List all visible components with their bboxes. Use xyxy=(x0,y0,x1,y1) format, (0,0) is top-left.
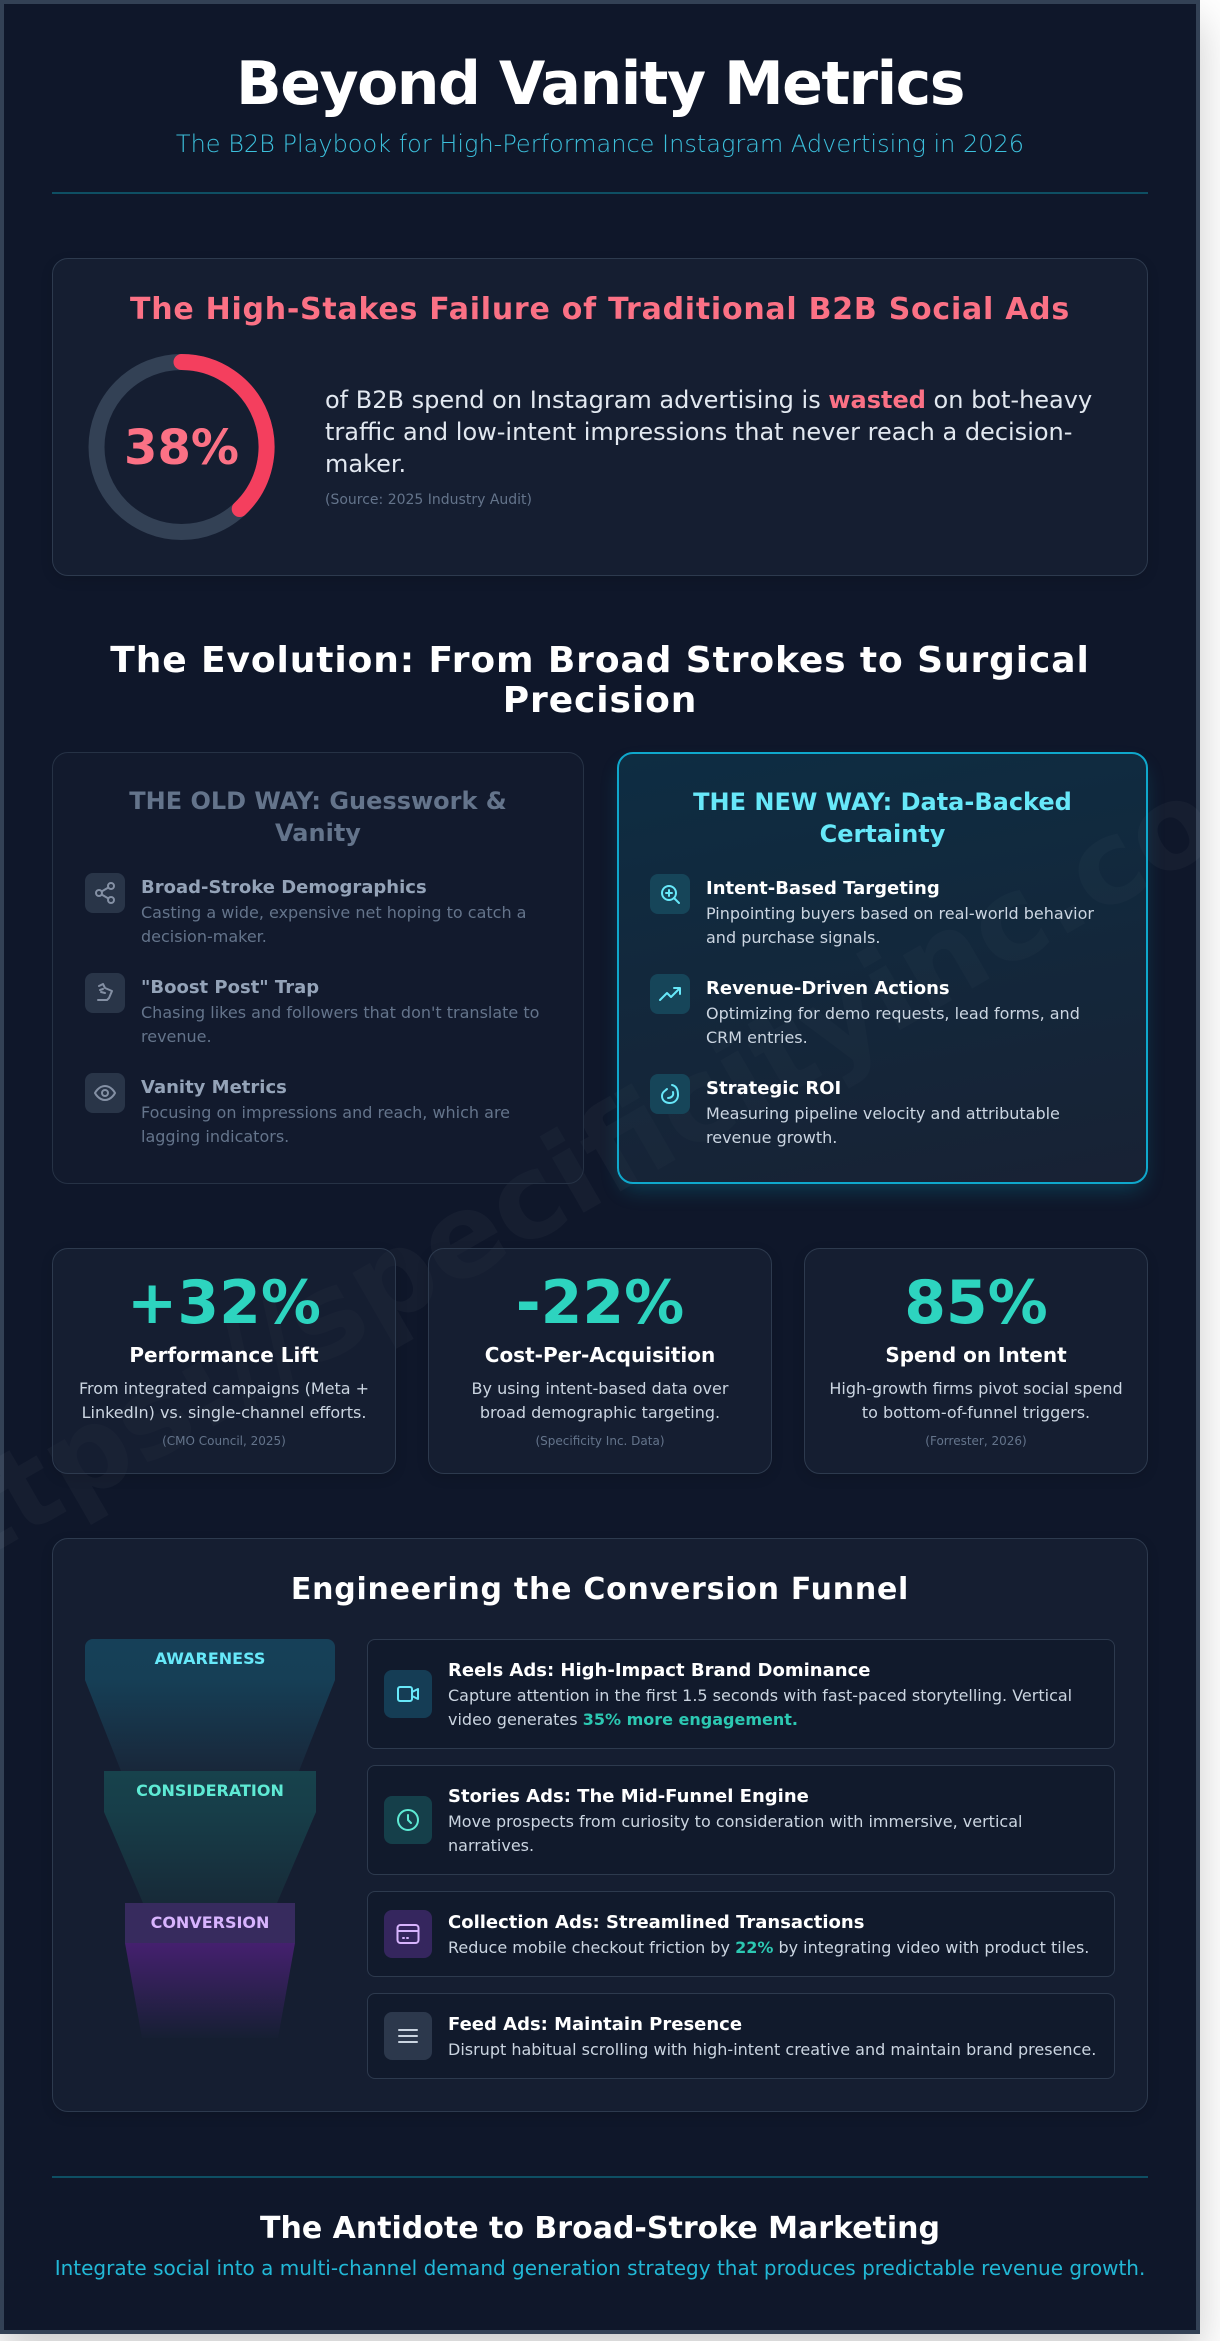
ad card: stories xyxy=(367,1765,1115,1875)
heading: old way: THE OLD WAY: Guesswork & Vanity xyxy=(129,787,507,847)
icon: eye xyxy=(85,1073,125,1113)
funnel stage: awareness xyxy=(85,1639,335,1771)
item title: roi: Strategic ROI xyxy=(706,1078,841,1099)
icon: trending up xyxy=(650,974,690,1014)
stat card: spend on intent: 85% xyxy=(904,1268,1048,1338)
stat card: performance lift: +32% xyxy=(127,1268,321,1338)
icon: clock xyxy=(384,1796,432,1844)
title: feed: Feed Ads: Maintain Presence xyxy=(448,2014,742,2035)
heading: failure: The High-Stakes Failure of Traditional B2B Social Ads xyxy=(130,292,1070,327)
icon: card xyxy=(384,1910,432,1958)
stat card: cost per acquisition: By using intent-based data over broad demographic targeting. xyxy=(472,1379,728,1422)
icon: video xyxy=(384,1670,432,1718)
stat card: performance lift: From integrated campaigns (Meta + LinkedIn) vs. single-channel efforts. xyxy=(79,1379,369,1422)
stat card: performance lift: (CMO Council, 2025) xyxy=(162,1434,286,1448)
panel: conversion funnel xyxy=(52,1538,1148,2112)
icon: share xyxy=(85,873,125,913)
stat card: spend on intent: High-growth firms pivot social spend to bottom-of-funnel triggers. xyxy=(829,1379,1123,1422)
item description: demographics: Casting a wide, expensive net hoping to catch a decision-maker. xyxy=(141,903,526,946)
title: Beyond Vanity Metrics xyxy=(236,49,964,119)
title: collection: Collection Ads: Streamlined Transactions xyxy=(448,1912,864,1933)
funnel stage: conversion xyxy=(125,1903,295,2038)
stat card: cost per acquisition: Cost-Per-Acquisition xyxy=(485,1343,715,1367)
icon: menu xyxy=(384,2012,432,2060)
funnel stage: consideration xyxy=(104,1771,316,1903)
description: feed: Disrupt habitual scrolling with high-intent creative and maintain brand presence. xyxy=(448,2040,1096,2059)
description: stories: Move prospects from curiosity to consideration with immersive, vertical narratives. xyxy=(448,1812,1022,1855)
title: reels: Reels Ads: High-Impact Brand Dominance xyxy=(448,1660,870,1681)
item title: revenue: Revenue-Driven Actions xyxy=(706,978,950,999)
heading: new way: THE NEW WAY: Data-Backed Certainty xyxy=(693,788,1072,848)
item title: demographics: Broad-Stroke Demographics xyxy=(141,877,427,898)
source note: (Source: 2025 Industry Audit) xyxy=(325,492,532,508)
panel: new way xyxy=(617,752,1148,1184)
section heading: evolution: The Evolution: From Broad Strokes to Surgical Precision xyxy=(110,640,1090,721)
stat card: performance lift: Performance Lift xyxy=(129,1343,319,1367)
item title: vanity metrics: Vanity Metrics xyxy=(141,1077,287,1098)
description: collection: Reduce mobile checkout friction by 22% by integrating video with product tiles. xyxy=(448,1938,1089,1957)
stat card: spend on intent: (Forrester, 2026) xyxy=(925,1434,1027,1448)
footer heading: The Antidote to Broad-Stroke Marketing xyxy=(260,2211,940,2246)
icon: roi xyxy=(650,1074,690,1114)
stat card: spend on intent: Spend on Intent xyxy=(885,1343,1067,1367)
stat card: performance lift xyxy=(52,1248,396,1474)
stat card: cost per acquisition: -22% xyxy=(516,1268,684,1338)
ad card: collection xyxy=(367,1891,1115,1977)
item title: boost post: "Boost Post" Trap xyxy=(141,977,319,998)
panel: old way xyxy=(52,752,584,1184)
funnel stage: awareness: AWARENESS xyxy=(155,1649,265,1668)
item description: revenue: Optimizing for demo requests, lead forms, and CRM entries. xyxy=(706,1004,1080,1047)
funnel diagram xyxy=(85,1639,335,2028)
funnel stage: consideration: CONSIDERATION xyxy=(136,1781,284,1800)
title: stories: Stories Ads: The Mid-Funnel Engine xyxy=(448,1786,809,1807)
stat card: cost per acquisition xyxy=(428,1248,772,1474)
donut chart: 38% xyxy=(88,354,275,540)
description: reels: Capture attention in the first 1.5 seconds with fast-paced storytelling. Vertical video generates 35% more engagement. xyxy=(448,1686,1072,1729)
icon: hand xyxy=(85,973,125,1013)
item description: intent: Pinpointing buyers based on real-world behavior and purchase signals. xyxy=(706,904,1094,947)
heading: funnel: Engineering the Conversion Funnel xyxy=(291,1572,909,1607)
funnel stage: conversion: CONVERSION xyxy=(151,1913,269,1932)
ad card: feed xyxy=(367,1993,1115,2079)
statement text: of B2B spend on Instagram advertising is wasted on bot-heavy traffic and low-intent impressions that never reach a decision-maker. xyxy=(325,386,1092,478)
footer text: Integrate social into a multi-channel demand generation strategy that produces predictable revenue growth. xyxy=(55,2256,1145,2280)
item description: boost post: Chasing likes and followers that don't translate to revenue. xyxy=(141,1003,539,1046)
item title: intent: Intent-Based Targeting xyxy=(706,878,940,899)
stat card: cost per acquisition: (Specificity Inc. Data) xyxy=(535,1434,665,1448)
item description: vanity metrics: Focusing on impressions and reach, which are lagging indicators. xyxy=(141,1103,510,1146)
icon: search plus xyxy=(650,874,690,914)
ad card: reels xyxy=(367,1639,1115,1749)
subtitle: The B2B Playbook for High-Performance Instagram Advertising in 2026 xyxy=(176,130,1024,158)
donut chart: 38%: 38% xyxy=(124,420,239,476)
panel: failure of traditional ads xyxy=(52,258,1148,576)
stat card: spend on intent xyxy=(804,1248,1148,1474)
item description: roi: Measuring pipeline velocity and attributable revenue growth. xyxy=(706,1104,1060,1147)
